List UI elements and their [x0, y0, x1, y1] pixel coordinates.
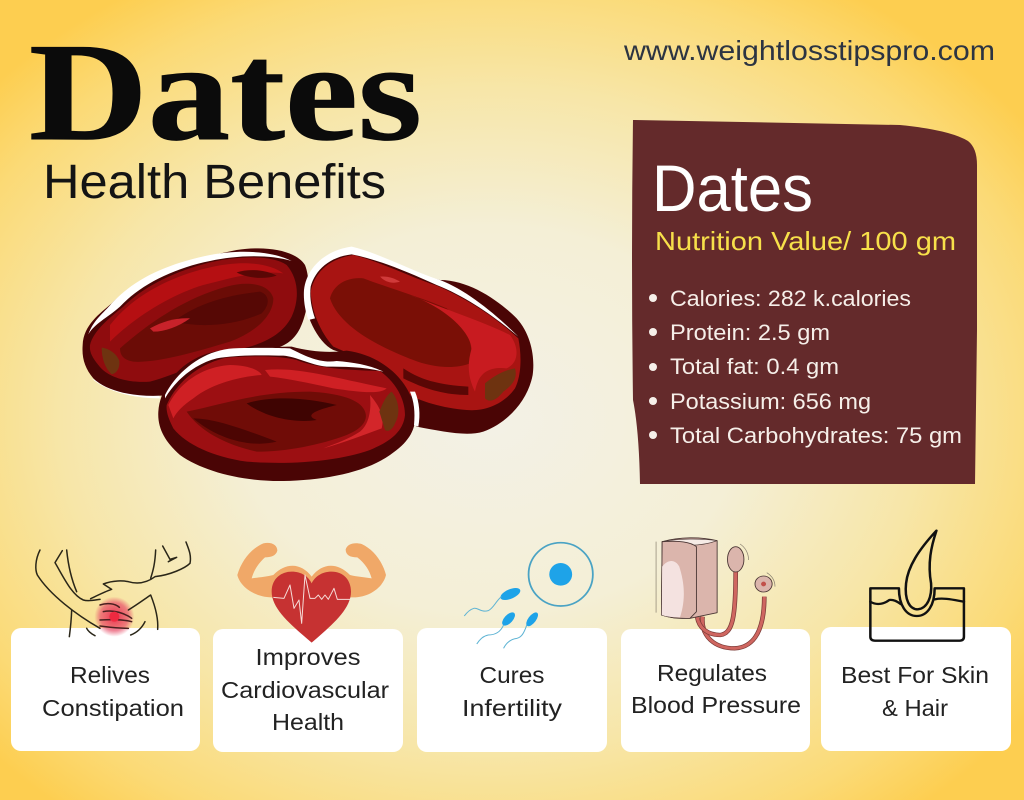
icon: strong heart: [237, 543, 386, 643]
card: constipation: Relives: [70, 662, 150, 688]
card: skin and hair: [821, 627, 1011, 751]
icon: sperm and egg: [464, 543, 593, 648]
nutrient list: [649, 286, 962, 448]
subtitle: Health Benefits: Health Benefits: [43, 156, 386, 209]
website url: www.weightlosstipspro.com: [623, 35, 995, 66]
icon: hair follicle: [870, 531, 964, 641]
card: skin and hair: & Hair: [882, 695, 948, 721]
card: infertility: Cures: [480, 662, 544, 688]
date: right: [304, 247, 533, 434]
illustration: three dates: [82, 247, 533, 481]
card: blood pressure: Regulates: [657, 660, 767, 686]
nutrient list: Potassium: 656 mg: [670, 389, 871, 414]
card: constipation: Constipation: [42, 695, 184, 721]
card: infertility: Infertility: [462, 695, 563, 721]
icon: blood pressure cuff: [656, 538, 775, 648]
panel: nutrition value: [632, 120, 977, 484]
icon: abdomen pain: [36, 542, 190, 637]
nutrient list: Total fat: 0.4 gm: [670, 354, 839, 379]
title: Dates: Dates: [29, 15, 422, 170]
date: front: [158, 347, 419, 481]
card: constipation: [11, 628, 200, 751]
nutrient list: Calories: 282 k.calories: [670, 286, 911, 311]
card: blood pressure: Blood Pressure: [631, 692, 801, 718]
card: cardiovascular: [213, 629, 403, 752]
card: infertility: [417, 628, 607, 752]
panel heading: Dates: Dates: [652, 151, 813, 225]
panel subheading: nutrition value per 100 gm: Nutrition Value/ 100 gm: [655, 226, 956, 256]
card: skin and hair: Best For Skin: [841, 662, 989, 688]
card: cardiovascular: Cardiovascular: [221, 677, 389, 703]
date: upper left: [82, 248, 309, 398]
card: cardiovascular: Improves: [256, 644, 360, 670]
card: blood pressure: [621, 629, 810, 752]
nutrient list: Total Carbohydrates: 75 gm: [670, 423, 962, 448]
card: cardiovascular: Health: [272, 709, 344, 735]
nutrient list: Protein: 2.5 gm: [670, 320, 830, 345]
